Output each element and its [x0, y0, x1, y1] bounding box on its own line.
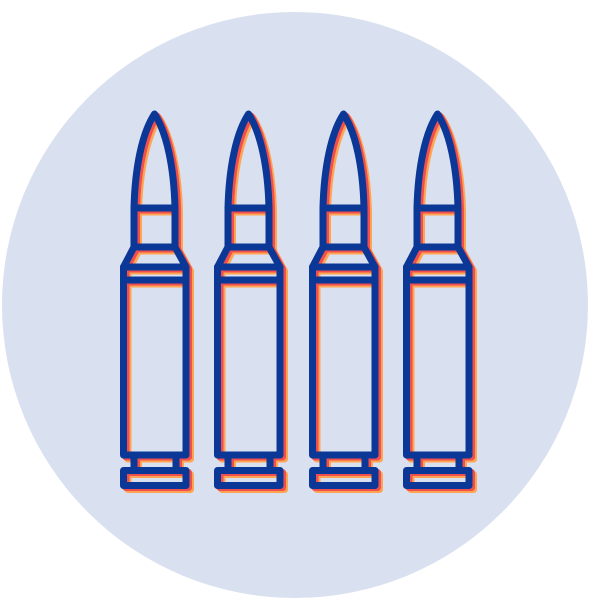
bullet 1 [124, 114, 190, 490]
bullet 2 [218, 114, 284, 490]
bullet 4 [406, 114, 474, 490]
bullet 3 [312, 114, 380, 490]
